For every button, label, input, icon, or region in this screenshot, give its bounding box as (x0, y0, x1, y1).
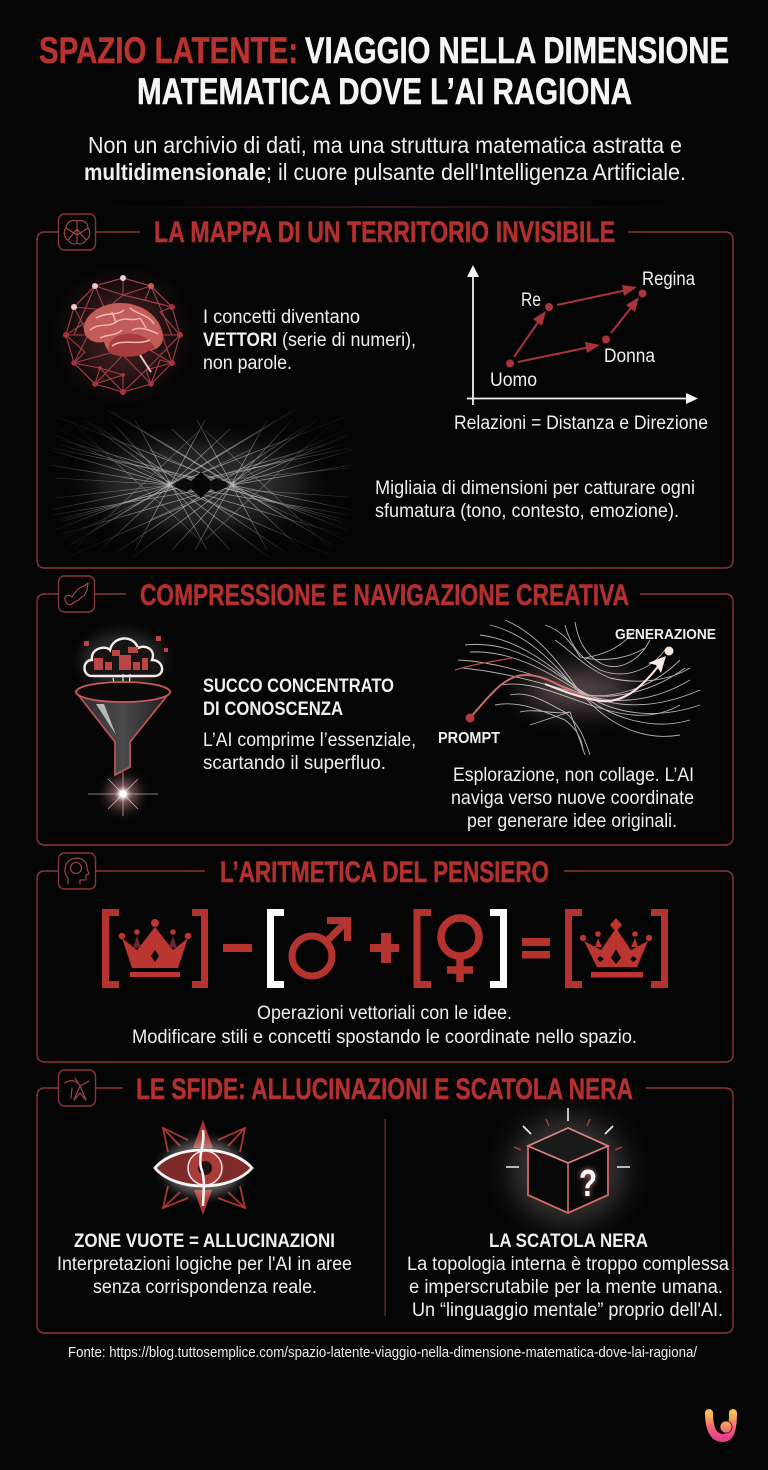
subtitle: ; il cuore pulsante dell'Intelligenza Artificiale. (266, 159, 686, 185)
text: succo concentrato (203, 676, 416, 774)
heading: L’ARITMETICA DEL PENSIERO (220, 856, 549, 889)
bracket white right (490, 912, 504, 984)
chart: vector relations: Uomo (490, 370, 537, 391)
bracket pair and crown: regina (568, 912, 664, 984)
text: dimensioni (375, 478, 695, 522)
icon: male symbol (292, 920, 348, 976)
title: MATEMATICA DOVE L’AI RAGIONA (137, 71, 632, 112)
text: la scatola nera: Un “linguaggio mentale” proprio dell'AI. (412, 1300, 723, 1321)
title (39, 30, 729, 112)
icon: head with brain (58, 853, 96, 889)
text: vettori: (serie di numeri), (282, 330, 416, 351)
text: succo concentrato: SUCCO CONCENTRATO (203, 676, 394, 697)
panel: le sfide (37, 1070, 733, 1333)
text: operazioni vettoriali: Modificare stili e concetti spostando le coordinate nello spazio. (132, 1027, 637, 1048)
chart: vector relations: Donna (604, 346, 655, 367)
panel: l'aritmetica del pensiero (37, 853, 733, 1062)
text: la scatola nera: La topologia interna è troppo complessa (407, 1254, 729, 1275)
text: la scatola nera (407, 1231, 729, 1321)
image: latent navigation path (438, 620, 716, 755)
panel: compressione e navigazione creativa (37, 576, 733, 845)
heading: LA MAPPA DI UN TERRITORIO INVISIBILE (154, 216, 615, 249)
icon: logo (709, 1413, 733, 1438)
image: latent navigation path: PROMPT (438, 730, 500, 747)
icon: navigation path (58, 576, 94, 612)
text: dimensioni: sfumatura (tono, contesto, emozione). (375, 501, 679, 522)
text: esplorazione (451, 765, 694, 832)
image: latent navigation path: GENERAZIONE (615, 626, 716, 643)
subtitle: multidimensionale (84, 159, 266, 185)
text: vettori: I concetti diventano (203, 307, 360, 328)
title: SPAZIO LATENTE: (39, 30, 298, 71)
chart: vector relations: Relazioni = Distanza e Direzione (454, 413, 708, 434)
text: zone vuote: ZONE VUOTE = ALLUCINAZIONI (74, 1231, 335, 1252)
chart: vector relations (454, 265, 708, 434)
source line: Fonte: https://blog.tuttosemplice.com/spazio-latente-viaggio-nella-dimensione-matematica-dove-lai-ragiona/ (68, 1345, 698, 1361)
plus (370, 933, 399, 963)
text: vettori: non parole. (203, 353, 292, 374)
text: succo concentrato: DI CONOSCENZA (203, 699, 343, 720)
equation: re minus uomo plus donna equals regina (106, 912, 664, 984)
bracket red left (417, 912, 431, 984)
icon: black box: ? (579, 1163, 597, 1205)
text: succo concentrato: L’AI comprime l’essenziale, (203, 730, 416, 751)
chart: vector relations: Regina (642, 269, 695, 290)
icon: funnel with data cloud (76, 632, 170, 816)
text: zone vuote (57, 1231, 352, 1298)
image: multidimensional lines (50, 407, 352, 558)
text: vettori: VETTORI (203, 330, 277, 351)
chart: vector relations: Re (521, 290, 541, 311)
text: operazioni vettoriali: Operazioni vettoriali con le idee. (257, 1003, 512, 1024)
icon: female symbol (441, 918, 479, 982)
text: dimensioni: Migliaia di dimensioni per catturare ogni (375, 478, 695, 499)
icon: black box (506, 1108, 630, 1224)
text: la scatola nera: LA SCATOLA NERA (489, 1231, 648, 1252)
icon: distorted figure (58, 1070, 96, 1106)
text: zone vuote: Interpretazioni logiche per l'AI in aree (57, 1254, 352, 1275)
text: esplorazione: naviga verso nuove coordinate (451, 788, 694, 809)
bracket pair and crown: re (106, 912, 204, 984)
subtitle (84, 132, 686, 185)
text: succo concentrato: scartando il superfluo. (203, 753, 386, 774)
bracket white left (270, 912, 284, 984)
heading: COMPRESSIONE E NAVIGAZIONE CREATIVA (140, 579, 629, 612)
panel: la mappa di un territorio invisibile (37, 214, 733, 568)
subtitle: Non un archivio di dati, ma una struttura matematica astratta e (88, 132, 682, 158)
minus (223, 944, 252, 952)
text: esplorazione: per generare idee originali. (467, 811, 677, 832)
text: operazioni vettoriali (132, 1003, 637, 1048)
text: zone vuote: senza corrispondenza reale. (93, 1277, 317, 1298)
icon: brain outline (58, 214, 96, 250)
icon: brain in neural network (63, 275, 183, 395)
icon: hallucination eye (155, 1120, 252, 1215)
text: vettori (203, 307, 416, 374)
text: esplorazione: Esplorazione, non collage. L’AI (453, 765, 694, 786)
equals (522, 938, 550, 958)
text: la scatola nera: e imperscrutabile per la mente umana. (409, 1277, 723, 1298)
